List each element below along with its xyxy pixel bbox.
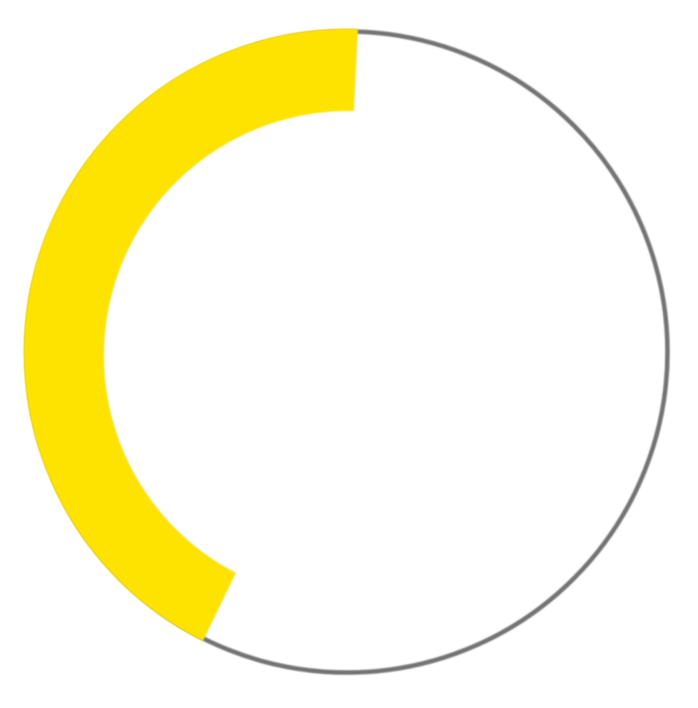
yellow arc segment [24, 29, 358, 641]
